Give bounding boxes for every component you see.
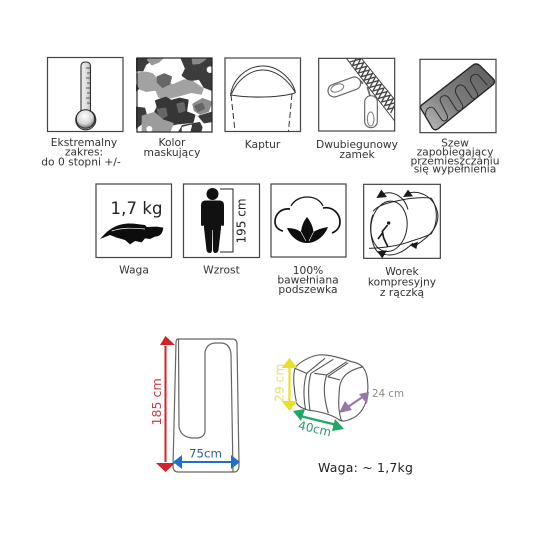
sleeping bag outline [173, 339, 239, 472]
label: anti-shift seam: przemieszczaniu [410, 154, 500, 168]
label: hood: Kaptur [245, 138, 281, 151]
total weight label: Waga: ~ 1,7kg [318, 460, 413, 475]
label: 185 cm: 185 cm [149, 378, 164, 426]
label: anti-shift seam: się wypełnienia [414, 162, 496, 176]
label: 75cm: 75cm [189, 446, 222, 460]
label: extreme range: do 0 stopni +/- [41, 156, 121, 168]
infographic [42, 56, 499, 474]
label: two-way zipper: zamek [339, 148, 375, 161]
label: camo colour: maskujący [144, 146, 200, 159]
label: 29 cm: 29 cm [272, 364, 286, 402]
icon: weight feather: 1,7 kg [110, 199, 163, 218]
label: compression sack: z rączką [380, 286, 425, 299]
purple depth arrow [345, 396, 364, 409]
diagram: sleeping bag dimensions [149, 336, 240, 472]
label: cotton lining: podszewka [278, 283, 338, 296]
yellow height arrow [288, 366, 291, 404]
label: cotton lining: bawełniana [277, 274, 339, 286]
label: weight: Waga [119, 264, 149, 276]
red height arrow [164, 346, 166, 462]
label: height: Wzrost [203, 264, 240, 276]
label: anti-shift seam: zapobiegający [417, 146, 493, 158]
label: two-way zipper: Dwubiegunowy [316, 138, 398, 151]
label: 40cm: 40cm [297, 418, 333, 439]
label: anti-shift seam: Szew [441, 136, 469, 150]
label: camo colour: Kolor [159, 136, 185, 149]
icon: anti-shift stitching [420, 59, 496, 133]
icon: height figure: 195 cm [234, 198, 248, 244]
icon: camouflage pattern [136, 57, 213, 133]
green length arrow [300, 416, 337, 425]
label: extreme range: Ekstremalny [51, 136, 117, 149]
icon: thermometer [48, 58, 123, 132]
icon: two-way zipper [319, 55, 399, 131]
icon: cotton [271, 184, 346, 257]
icon: hood [225, 58, 300, 132]
label: compression sack: kompresyjny [368, 276, 436, 288]
icon: compression bag [364, 184, 440, 258]
sack outline [294, 355, 368, 421]
label: 24 cm: 24 cm [372, 388, 404, 400]
diagram: compressed sack dimensions [272, 355, 404, 439]
blue width arrow [180, 461, 232, 463]
label: cotton lining: 100% [293, 264, 323, 277]
label: extreme range: zakres: [65, 146, 103, 158]
label: compression sack: Worek [385, 265, 419, 278]
icon: height figure [184, 184, 260, 258]
icon: weight feather [96, 184, 172, 258]
